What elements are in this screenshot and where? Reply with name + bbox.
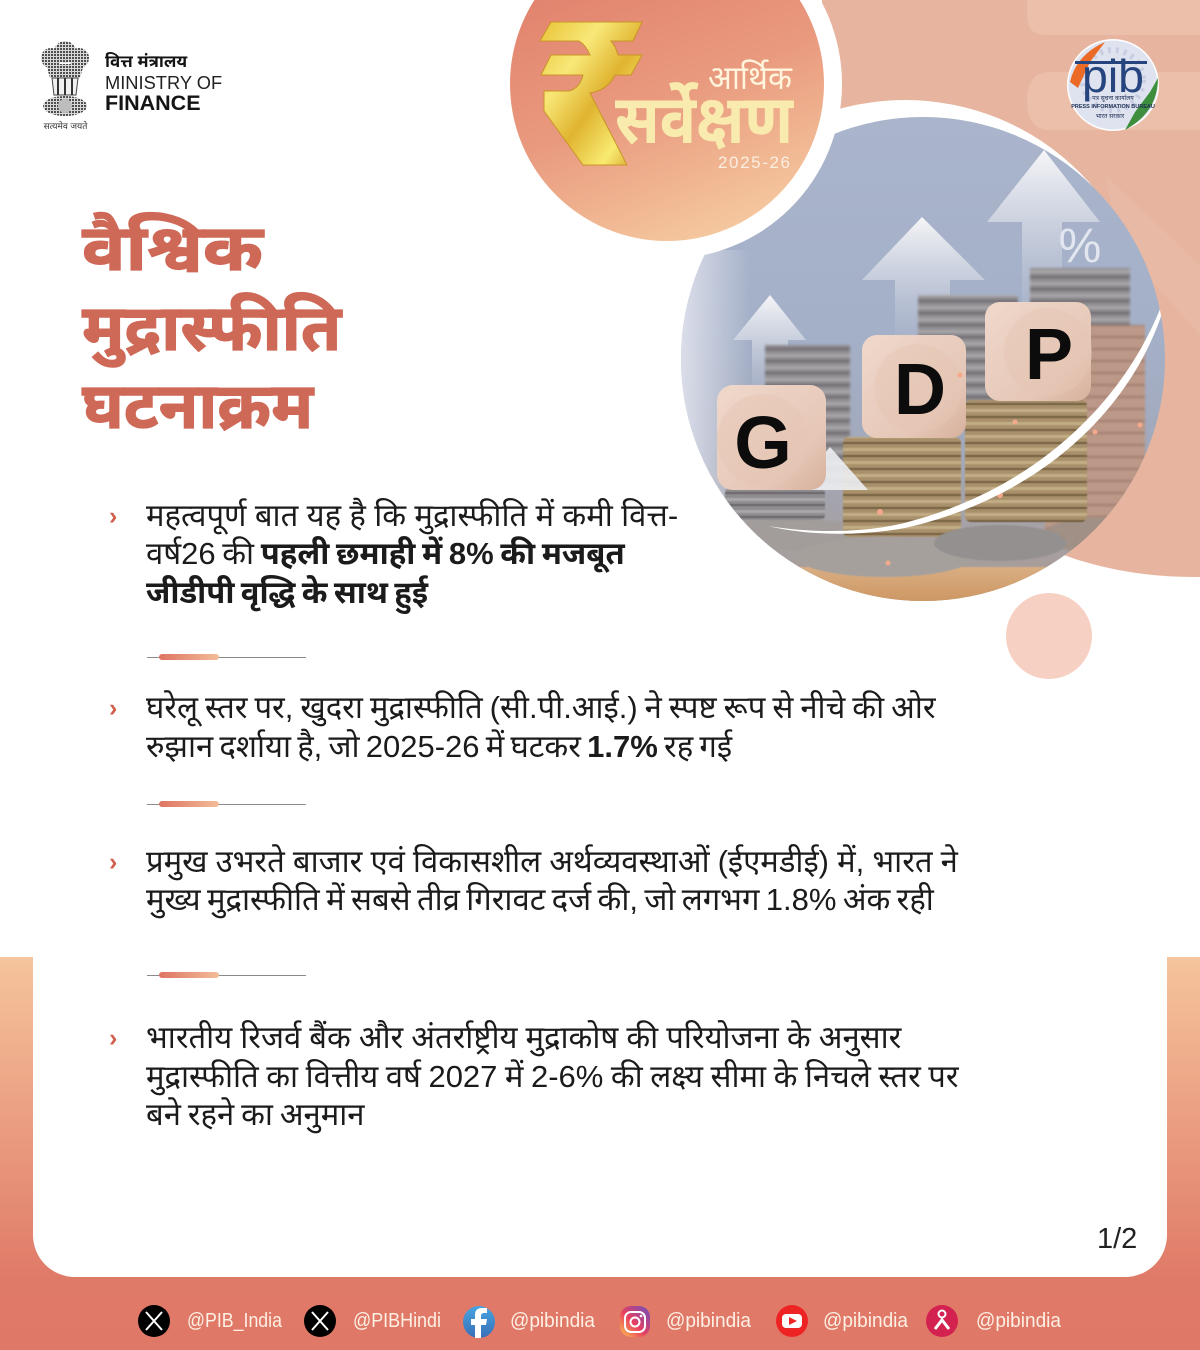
bullet 4 bbox=[109, 1020, 959, 1134]
main title bbox=[81, 212, 343, 442]
gold coin stacks bbox=[725, 400, 1087, 537]
handle: @pibindia bbox=[510, 1310, 596, 1332]
peach background shape bbox=[820, 0, 1200, 577]
small decorative circle bbox=[1006, 593, 1092, 679]
bullet marker: › bbox=[109, 848, 117, 876]
wood block P bbox=[985, 302, 1092, 401]
handle: @PIBHindi bbox=[353, 1310, 441, 1332]
page number: 1/2 bbox=[1097, 1223, 1137, 1255]
national emblem: सत्यमेव जयते bbox=[44, 120, 88, 131]
handle: @pibindia bbox=[976, 1310, 1062, 1332]
PIB logo: पत्र सूचना कार्यालय bbox=[1092, 94, 1134, 103]
wood block P: P bbox=[1025, 315, 1073, 395]
front small arrow bbox=[810, 447, 868, 490]
bullet 3 bbox=[109, 844, 958, 918]
icon: instagram bbox=[620, 1306, 650, 1337]
sparkles bbox=[877, 372, 1142, 566]
percent sign: % bbox=[1059, 220, 1101, 273]
title line 3: घटनाक्रम bbox=[82, 370, 313, 442]
national emblem bbox=[41, 41, 89, 131]
bullet 1 bbox=[109, 498, 678, 614]
icon: youtube bbox=[776, 1305, 808, 1337]
line: घरेलू स्तर पर, खुदरा मुद्रास्फीति (सी.पी.आई.) ने स्पष्ट रूप से नीचे की ओर bbox=[146, 690, 936, 725]
finance: FINANCE bbox=[105, 91, 201, 115]
PIB logo: PRESS INFORMATION BUREAU bbox=[1071, 104, 1155, 110]
bottom frame with gradient bbox=[0, 957, 1200, 1350]
wood block D: D bbox=[894, 350, 946, 430]
icon: facebook bbox=[463, 1306, 495, 1338]
bullet marker: › bbox=[109, 694, 117, 722]
survey title: आर्थिक bbox=[708, 59, 793, 96]
PIB logo bbox=[1067, 39, 1159, 131]
line: मुख्य मुद्रास्फीति में सबसे तीव्र गिरावट दर्ज की, जो लगभग 1.8% अंक रही bbox=[146, 882, 934, 917]
rupee symbol bbox=[540, 22, 642, 165]
ministry hindi: वित्त मंत्रालय bbox=[105, 52, 187, 71]
title line 2: मुद्रास्फीति bbox=[82, 292, 341, 364]
handle: @PIB_India bbox=[187, 1310, 283, 1332]
bullet marker: › bbox=[109, 502, 117, 530]
title line 1: वैश्विक bbox=[82, 212, 263, 284]
line: वर्ष26 की पहली छमाही में 8% की मजबूत bbox=[146, 536, 625, 571]
PIB logo: भारत सरकार bbox=[1096, 114, 1125, 120]
bullet 2 bbox=[109, 690, 936, 764]
line: बने रहने का अनुमान bbox=[146, 1097, 364, 1132]
survey title: 2025-26 bbox=[718, 153, 790, 172]
handle: @pibindia bbox=[666, 1310, 752, 1332]
line: प्रमुख उभरते बाजार एवं विकासशील अर्थव्यवस्थाओं (ईएमडीई) में, भारत ने bbox=[146, 844, 958, 879]
icon: koo bbox=[926, 1305, 958, 1337]
GDP photo circle bbox=[680, 115, 1170, 605]
survey title: सर्वेक्षण bbox=[615, 82, 794, 158]
line: भारतीय रिजर्व बैंक और अंतर्राष्ट्रीय मुद्राकोष की परियोजना के अनुसार bbox=[146, 1020, 901, 1055]
PIB logo: pib bbox=[1082, 50, 1144, 102]
header graphics bbox=[41, 0, 1200, 679]
back foreground coins bbox=[744, 518, 1105, 551]
ministry wordmark bbox=[105, 52, 222, 115]
background coin stacks bbox=[765, 268, 1145, 545]
survey badge circle bbox=[510, 0, 824, 241]
icon: X bbox=[138, 1305, 170, 1337]
line: महत्वपूर्ण बात यह है कि मुद्रास्फीति में कमी वित्त- bbox=[146, 498, 678, 533]
wood block G bbox=[717, 385, 826, 490]
ministry of: MINISTRY OF bbox=[105, 72, 222, 93]
line: रुझान दर्शाया है, जो 2025-26 में घटकर 1.7% रह गई bbox=[146, 729, 732, 764]
wood block D bbox=[862, 335, 966, 438]
icon: X hindi bbox=[304, 1305, 336, 1337]
background arrows bbox=[733, 150, 1100, 400]
bottom white content panel bbox=[33, 940, 1167, 1277]
white ring around survey badge bbox=[492, 0, 842, 259]
wood block G: G bbox=[734, 401, 792, 484]
table and foreground coins bbox=[798, 525, 1066, 601]
bullet marker: › bbox=[109, 1024, 117, 1052]
handle: @pibindia bbox=[823, 1310, 909, 1332]
white swoosh bbox=[768, 296, 1165, 534]
white crescent above GDP photo bbox=[658, 100, 1152, 594]
line: मुद्रास्फीति का वित्तीय वर्ष 2027 में 2-6% की लक्ष्य सीमा के निचले स्तर पर bbox=[146, 1059, 959, 1094]
line: जीडीपी वृद्धि के साथ हुई bbox=[146, 575, 428, 610]
survey title bbox=[615, 59, 794, 172]
